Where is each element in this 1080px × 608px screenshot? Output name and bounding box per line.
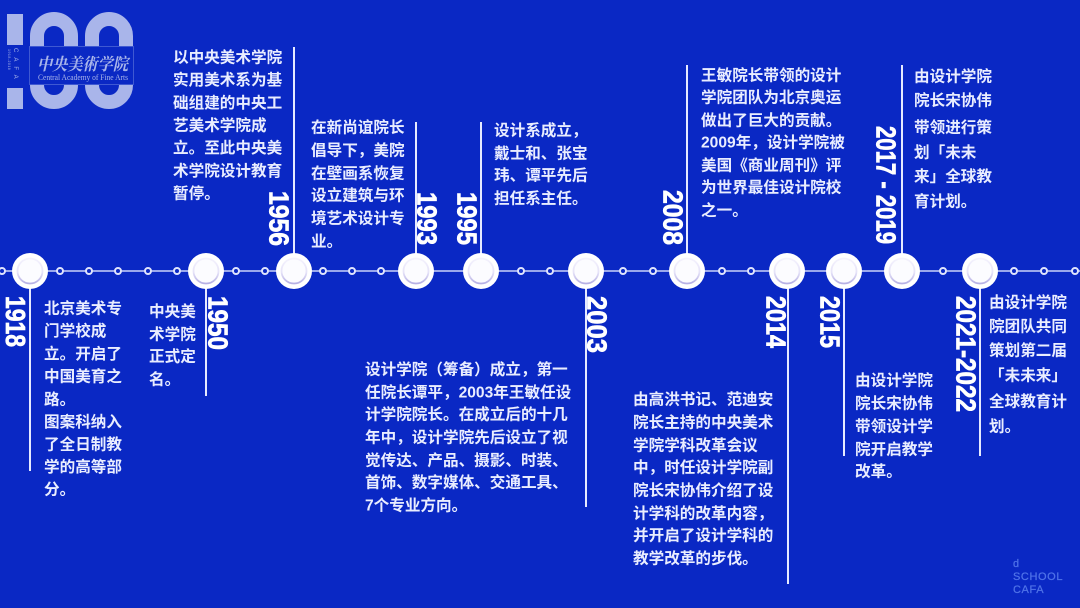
- text: 2008: 美国《商业周刊》评: [701, 156, 842, 174]
- text: 2003: 设计学院（筹备）成立，第一: [365, 360, 568, 378]
- text: 2014: 院长主持的中央美术: [633, 412, 774, 432]
- text: 1950: 中央美: [149, 302, 196, 320]
- text: 1993: 在新尚谊院长: [311, 118, 405, 136]
- text: 2014: 由高洪书记、范迪安: [633, 390, 773, 408]
- text: 2021-2022: 「未未来」: [989, 366, 1067, 384]
- brand mark: d SCHOOL CAFA: CAFA: [1013, 584, 1044, 596]
- text: 1993: 设立建筑与环: [311, 186, 405, 204]
- text: 2015: 院长宋协伟: [855, 394, 933, 412]
- text: 1918: 了全日制教: [44, 434, 122, 454]
- timeline nodes: [12, 253, 998, 289]
- text: 2008: 王敏院长带领的设计: [701, 66, 842, 84]
- text: 2003: 年中，设计学院先后设立了视: [365, 428, 568, 446]
- text: 1918: 北京美术专: [44, 298, 122, 318]
- text: 2003: 计学院院长。在成立后的十几: [365, 404, 568, 424]
- year labels: 2017 - 2019: [870, 126, 902, 244]
- year labels: 2003: [582, 296, 612, 353]
- text: 1995: 设计系成立，: [494, 120, 588, 140]
- text: 2008: 做出了巨大的贡献。: [701, 112, 841, 130]
- text: 1956: 艺美术学院成: [173, 116, 267, 134]
- text: 1950: [149, 302, 196, 388]
- text: 2014: 计学科的改革内容，: [633, 504, 773, 522]
- timeline axis: [0, 268, 1080, 274]
- text: 1918: 学的高等部: [44, 457, 122, 476]
- stem lines: [30, 47, 980, 584]
- logo: CAFA 100: CAFA: [12, 48, 18, 84]
- text: 1956: 以中央美术学院: [173, 48, 283, 66]
- text: 1956: 础组建的中央工: [173, 94, 282, 112]
- text: 2015: 带领设计学: [855, 416, 933, 436]
- text: 1918: 门学校成: [44, 321, 107, 340]
- logo: CAFA 100: Central Academy of Fine Arts: [38, 73, 128, 82]
- year labels: 1950: [202, 296, 234, 350]
- text: 2014: 院长宋协伟介绍了设: [633, 480, 774, 500]
- text: 1993: 倡导下，美院: [311, 140, 405, 160]
- text: 2008: 学院团队为北京奥运: [701, 88, 842, 106]
- text: 1918: 路。: [44, 390, 75, 408]
- text: 1995: 戴士和、张宝: [494, 144, 588, 162]
- text: 2014: 并开启了设计学科的: [633, 526, 773, 544]
- year labels: 2008: [658, 190, 688, 245]
- text: 1950: 名。: [149, 370, 180, 388]
- year labels: 2021-2022: [950, 296, 982, 412]
- year labels: 1995: [452, 192, 482, 245]
- text: 2017-2019: [914, 66, 992, 210]
- text: 2003: 觉传达、产品、摄影、时装、: [365, 452, 568, 470]
- text: 2021-2022: 策划第二届: [989, 340, 1067, 360]
- text: 2014: [633, 390, 774, 568]
- text: 2021-2022: [989, 292, 1067, 436]
- brand mark: d SCHOOL CAFA: SCHOOL: [1013, 571, 1063, 583]
- text: 2003: 7个专业方向。: [365, 496, 467, 514]
- text: 2021-2022: 由设计学院: [989, 292, 1067, 312]
- text: 2003: [365, 360, 572, 514]
- year labels: 2014: [760, 296, 792, 348]
- logo: CAFA 100: 1918-2018: [7, 49, 11, 70]
- text: 2014: 教学改革的步伐。: [633, 548, 758, 568]
- text: 1993: 在壁画系恢复: [311, 164, 405, 182]
- text: 2003: 任院长谭平，2003年王敏任设: [365, 382, 572, 402]
- text: 1950: 术学院: [149, 324, 196, 344]
- text: 1918: 中国美育之: [44, 366, 122, 386]
- year labels: [0, 126, 982, 412]
- text: 2017-2019: 由设计学院: [914, 66, 992, 86]
- year labels: 1918: [0, 296, 31, 347]
- text: 2017-2019: 划「未未: [914, 144, 977, 162]
- text: 2017-2019: 来」全球教: [914, 166, 992, 186]
- text: 1956: 立。至此中央美: [173, 138, 283, 157]
- text: 2015: 由设计学院: [855, 370, 933, 390]
- text: 1993: [311, 118, 405, 250]
- text: 1956: 实用美术系为基: [173, 70, 283, 89]
- text: 2015: [855, 370, 933, 480]
- text: 1993: 境艺术设计专: [311, 208, 405, 228]
- text: 2021-2022: 全球教育计: [989, 392, 1067, 410]
- text: 2017-2019: 院长宋协伟: [914, 90, 992, 110]
- year labels: 2015: [814, 296, 846, 348]
- text: 2008: 为世界最佳设计院校: [701, 178, 842, 196]
- text: 1918: 立。开启了: [44, 344, 122, 363]
- text: 1950: 正式定: [149, 346, 196, 366]
- text: 2014: 学院学科改革会议: [633, 436, 758, 454]
- text: 2021-2022: 院团队共同: [989, 316, 1067, 336]
- text: 2008: 2009年，设计学院被: [701, 132, 845, 152]
- text: 2015: 改革。: [855, 462, 902, 480]
- text: 1918: 分。: [44, 480, 75, 498]
- brand mark: d SCHOOL CAFA: d: [1013, 558, 1020, 570]
- text: 1956: 术学院设计教育: [173, 161, 282, 180]
- text: 2015: 院开启教学: [855, 440, 933, 458]
- text: 2003: 首饰、数字媒体、交通工具、: [365, 472, 568, 492]
- text: 1918: [44, 298, 122, 498]
- text: 2008: [701, 66, 845, 220]
- text: 1995: 玮、谭平先后: [494, 166, 588, 184]
- text: 2017-2019: 带领进行策: [914, 118, 992, 136]
- text: 1956: 暂停。: [173, 184, 220, 202]
- text: 2008: 之一。: [701, 200, 748, 220]
- text: 1995: 担任系主任。: [494, 190, 588, 208]
- text: 1993: 业。: [311, 232, 342, 250]
- logo: CAFA 100: 中央美術学院: [37, 50, 131, 75]
- text: 2021-2022: 划。: [989, 418, 1020, 436]
- brand mark: d SCHOOL CAFA: [1013, 558, 1063, 596]
- logo: CAFA 100: [6, 14, 134, 109]
- text: 1995: [494, 120, 588, 208]
- text: 1956: [173, 48, 283, 202]
- text: 1918: 图案科纳入: [44, 412, 122, 431]
- text: 2017-2019: 育计划。: [914, 192, 976, 210]
- year labels: 1993: [412, 192, 442, 245]
- text: 2014: 中，时任设计学院副: [633, 458, 773, 476]
- year labels: 1956: [264, 191, 294, 246]
